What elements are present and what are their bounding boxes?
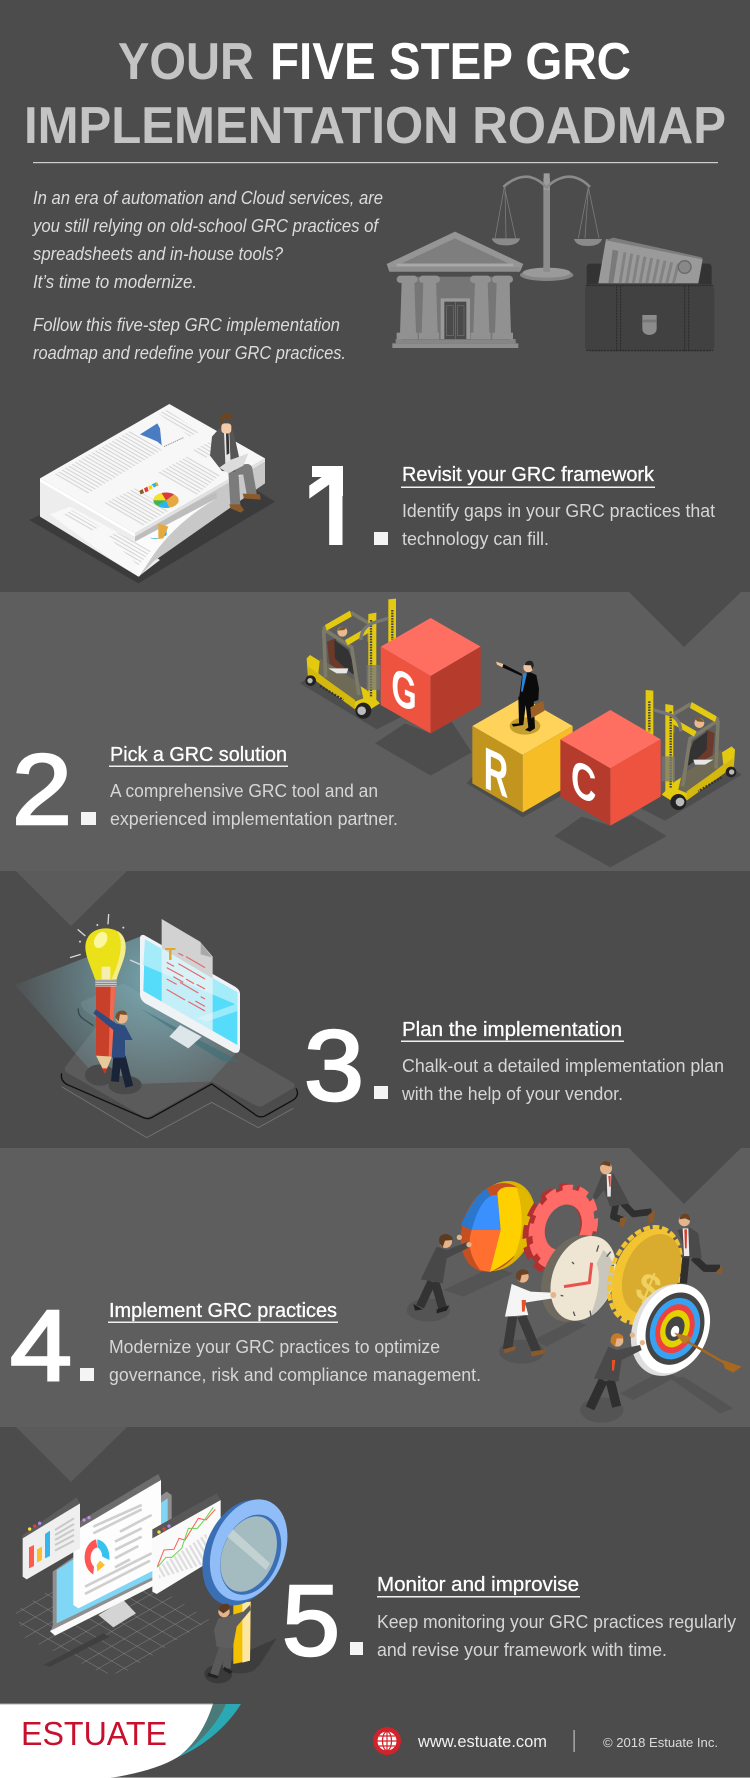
logo ribbon: [0, 1704, 241, 1778]
bar chart on report: [139, 423, 183, 494]
intro text: It’s time to modernize.: [33, 272, 197, 292]
person: top runner: [593, 1161, 655, 1227]
step number 2: 2: [12, 734, 72, 846]
left document: [23, 1497, 80, 1579]
icon: forklift right: [640, 690, 742, 821]
body text: [402, 501, 715, 549]
cube: G: G: [391, 657, 417, 725]
document: [162, 919, 213, 1031]
icon: courthouse: [387, 232, 523, 348]
step number 4: 4: [10, 1290, 72, 1402]
icon: pie wheel: [448, 1170, 548, 1282]
icon: scales, courthouse and briefcase: [387, 173, 714, 352]
rays: [70, 914, 140, 964]
illustration: lightbulb pencil and monitor: [15, 914, 297, 1138]
title: IMPLEMENTATION ROADMAP: [24, 97, 726, 155]
title: FIVE STEP GRC: [270, 33, 631, 91]
icon: arrow: [674, 1333, 742, 1373]
person: left pusher: [413, 1234, 472, 1313]
heading: Pick a GRC solution: [110, 744, 287, 766]
body text: technology can fill.: [402, 529, 549, 549]
illustration: team pushing gears: [407, 1161, 742, 1423]
body text: Identify gaps in your GRC practices that: [402, 501, 715, 521]
businessman: [207, 1604, 251, 1679]
icon: coin: [595, 1216, 695, 1334]
businessman: [93, 1009, 142, 1094]
logo wordmark: ESTUATE: [21, 1715, 167, 1752]
body text: [109, 1337, 481, 1385]
copyright: © 2018 Estuate Inc.: [603, 1735, 718, 1750]
person: right runner: [677, 1214, 723, 1283]
monitor: [140, 935, 240, 1062]
panel: step 5: [0, 1427, 750, 1778]
illustration: GRC cubes and forklifts: [300, 599, 742, 867]
icon: globe: [373, 1727, 401, 1755]
floor grid: [15, 1585, 210, 1673]
center document: [73, 1474, 161, 1608]
heading: Implement GRC practices: [109, 1300, 337, 1322]
number dot: [350, 1642, 363, 1655]
pencil with lightbulb: [85, 928, 126, 1086]
body text: Keep monitoring your GRC practices regularly: [377, 1612, 736, 1632]
intro text: In an era of automation and Cloud services, are: [33, 188, 383, 208]
body text: [110, 781, 398, 829]
title: [24, 33, 726, 155]
cube: C: [554, 690, 742, 867]
panel: step 2: [0, 592, 750, 871]
heading: Monitor and improvise: [377, 1574, 579, 1596]
step number 1: 1: [298, 445, 369, 588]
icon: clock: [529, 1225, 628, 1332]
icon: magnifier: [187, 1488, 302, 1683]
icon: briefcase: [585, 238, 714, 352]
heading: Plan the implementation: [402, 1019, 622, 1041]
right document: [152, 1493, 221, 1594]
step number 5: 5: [282, 1565, 340, 1677]
platform: [61, 983, 297, 1138]
number dot: [81, 812, 96, 825]
number dot: [374, 1086, 388, 1099]
icon: target: [618, 1273, 723, 1387]
icon: scales of justice: [492, 173, 602, 281]
illustration: man on stacked reports: [29, 404, 275, 583]
cube: C: C: [571, 749, 596, 816]
panel: step 4: [0, 1148, 750, 1427]
body text: Modernize your GRC practices to optimize: [109, 1337, 440, 1357]
icon: forklift left: [300, 599, 402, 729]
document: T: [165, 944, 176, 964]
number dot: [374, 532, 388, 545]
intro text: you still relying on old-school GRC practices of: [31, 216, 380, 236]
website: www.estuate.com: [417, 1732, 547, 1751]
panel: footer: [0, 1704, 750, 1778]
icon: gear: [514, 1178, 606, 1281]
body text: A comprehensive GRC tool and an: [110, 781, 378, 801]
pie chart on report: [153, 493, 179, 508]
step number 3: 3: [304, 1010, 364, 1122]
intro text: [31, 188, 383, 363]
body text: and revise your framework with time.: [377, 1640, 667, 1660]
cube: G: [375, 618, 481, 776]
icon: coin: $: [630, 1264, 667, 1313]
intro text: spreadsheets and in-house tools?: [33, 244, 283, 264]
panel: step 3: [0, 871, 750, 1148]
shadows: [407, 1267, 733, 1423]
panel: step 1: [29, 404, 715, 588]
businessman with laptop: [210, 413, 261, 513]
number dot: [80, 1368, 94, 1381]
monitor: [50, 1492, 172, 1636]
step number 1: [309, 466, 343, 545]
person: bottom pusher: [590, 1332, 645, 1408]
heading: Revisit your GRC framework: [402, 464, 655, 486]
title: YOUR: [118, 33, 254, 91]
intro text: roadmap and redefine your GRC practices.: [33, 343, 346, 363]
light beam: [15, 937, 240, 1085]
body text: governance, risk and compliance management.: [109, 1365, 481, 1385]
panel: header: [24, 33, 726, 363]
body text: [401, 1056, 724, 1104]
body text: experienced implementation partner.: [110, 809, 398, 829]
illustration: monitor dashboards and magnifier: [15, 1474, 302, 1683]
body text: [377, 1612, 736, 1660]
cube: R with businessman: R: [484, 735, 508, 812]
person: white shirt pusher: [503, 1269, 556, 1357]
intro text: Follow this five-step GRC implementation: [33, 315, 340, 335]
body text: with the help of your vendor.: [401, 1084, 623, 1104]
body text: Chalk-out a detailed implementation plan: [402, 1056, 724, 1076]
cube: R with businessman: [467, 661, 573, 817]
